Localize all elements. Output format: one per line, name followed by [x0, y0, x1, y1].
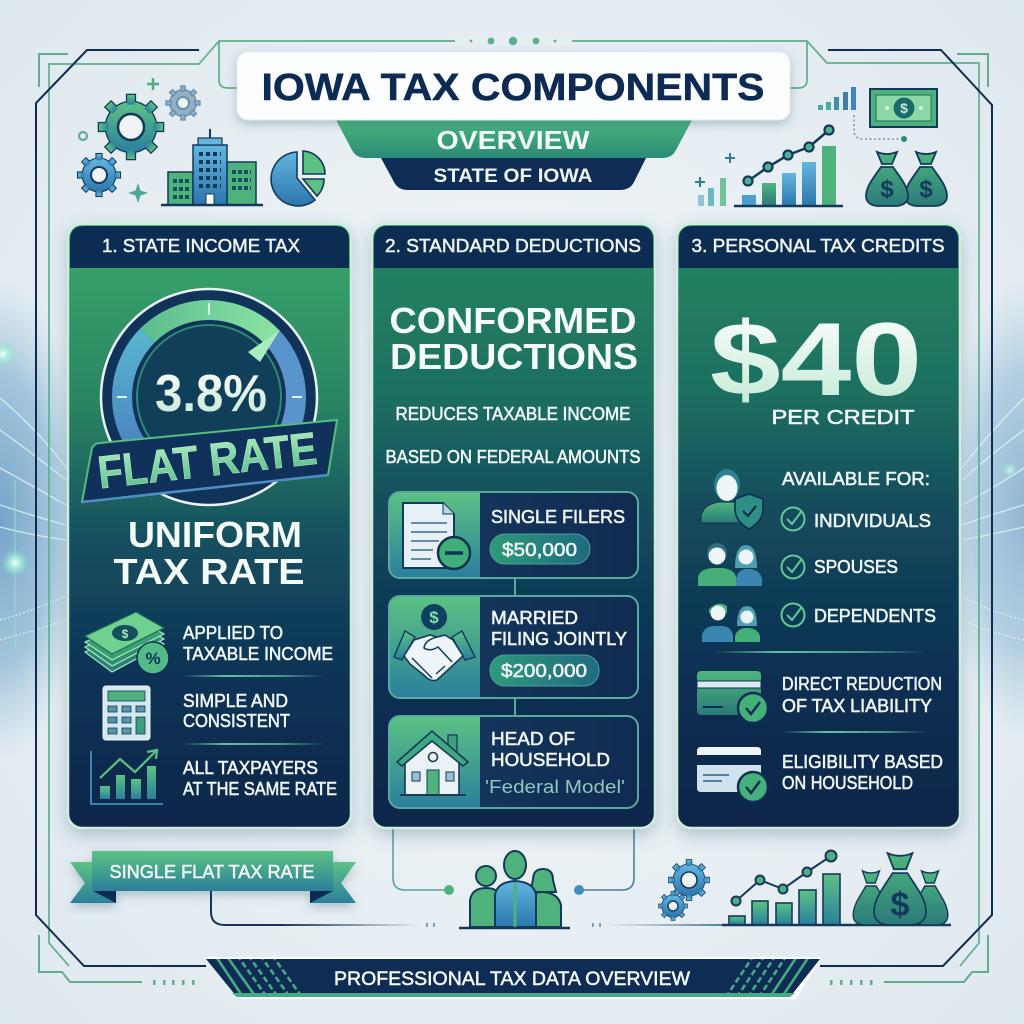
chart bottom [722, 850, 951, 925]
icon: handshake [394, 604, 475, 680]
availability heading: AVAILABLE FOR: [782, 469, 930, 489]
state of iowa ribbon: STATE OF IOWA [434, 165, 592, 187]
row: married filing jointly: FILING JOINTLY [491, 629, 627, 649]
item text: applied [183, 623, 333, 664]
credit amount: PER CREDIT [772, 407, 914, 429]
pill: $200,000: $200,000 [501, 661, 587, 681]
conformed deductions heading [390, 300, 638, 377]
panel heading: 3. PERSONAL TAX CREDITS [692, 236, 944, 256]
icons: top left gears, building, pie [78, 78, 325, 206]
money bags bottom: $ [891, 886, 910, 924]
icon: person with shield [701, 469, 763, 529]
icon: money bags: $ [880, 176, 894, 203]
item text: direct reduction: DIRECT REDUCTION [782, 674, 942, 694]
subtitle: TAX RATE [114, 551, 304, 592]
connector dots [444, 885, 584, 895]
panel heading [374, 226, 653, 268]
icon: pie chart [271, 151, 325, 206]
icon: dollar bill: $ [900, 100, 908, 116]
panel: personal tax credits [677, 224, 960, 828]
check list: DEPENDENTS [814, 606, 936, 626]
row: head of household: HOUSEHOLD [491, 750, 610, 770]
icon: growth chart [695, 126, 907, 206]
footer banner [204, 955, 822, 1000]
icon: document minus [403, 503, 470, 569]
item text: direct reduction [782, 674, 942, 716]
pill: $50,000: $50,000 [502, 540, 577, 560]
row: married filing jointly: MARRIED [491, 608, 578, 628]
item text: eligibility: ELIGIBILITY BASED [782, 752, 943, 772]
footer banner: PROFESSIONAL TAX DATA OVERVIEW [334, 968, 691, 990]
icon: handshake: $ [429, 608, 439, 627]
icon: dotted connector [854, 115, 901, 139]
icon: cash stack: $ [122, 627, 129, 641]
check list: SPOUSES [814, 557, 898, 577]
icon: dollar bill [870, 89, 937, 127]
pill: $200,000 [490, 655, 599, 686]
title banner [237, 52, 790, 190]
icon: calculator [103, 686, 150, 740]
panel connectors [393, 828, 634, 890]
panel heading [70, 226, 349, 268]
subtitle [114, 514, 304, 592]
panel heading: 2. STANDARD DEDUCTIONS [385, 236, 641, 256]
icon: house [397, 731, 468, 795]
item text: simple [183, 691, 290, 731]
icon: cash stack: % [145, 649, 161, 668]
overview ribbon [336, 120, 692, 158]
state of iowa ribbon [381, 158, 646, 190]
icon: credit card check [697, 671, 768, 723]
credit amount: $40 [710, 302, 922, 418]
panel: state income tax [68, 224, 351, 828]
icon: buildings [161, 129, 263, 205]
panel heading [679, 226, 958, 268]
item text: eligibility: ON HOUSEHOLD [782, 773, 913, 793]
hatching [216, 959, 809, 993]
row: married filing jointly [389, 596, 638, 698]
item text: applied: APPLIED TO [183, 623, 283, 643]
pill: $50,000 [490, 534, 590, 564]
row: head of household: 'Federal Model' [485, 777, 625, 797]
item text: simple: SIMPLE AND [183, 691, 288, 711]
item text: simple: CONSISTENT [183, 711, 290, 731]
icon: money bags: $ [919, 176, 933, 203]
icon: cash stack [85, 612, 169, 674]
row: head of household [389, 716, 638, 808]
ribbon: single flat tax rate [70, 851, 356, 903]
description [386, 404, 640, 467]
icon: id card check [697, 747, 768, 802]
icon: small bars [818, 87, 856, 110]
flat rate banner: FLAT RATE [95, 422, 319, 498]
icon: gears [78, 78, 200, 203]
ribbon: single flat tax rate: SINGLE FLAT TAX RATE [110, 862, 314, 882]
icon: rising chart [91, 750, 163, 804]
row: single filers: SINGLE FILERS [491, 507, 625, 527]
check list: INDIVIDUALS [814, 511, 931, 531]
icon: dependents [702, 604, 760, 642]
conformed deductions heading: CONFORMED [390, 300, 636, 341]
connector: ribbon to people [211, 891, 726, 927]
description: BASED ON FEDERAL AMOUNTS [386, 447, 640, 467]
gauge: 3.8% [155, 365, 267, 423]
panel: standard deductions [372, 224, 655, 828]
conformed deductions heading: DEDUCTIONS [390, 336, 638, 377]
item text: direct reduction: OF TAX LIABILITY [782, 696, 932, 716]
item text: all taxpayers: AT THE SAME RATE [183, 779, 337, 799]
item text: applied: TAXABLE INCOME [183, 644, 333, 664]
item text: all taxpayers: ALL TAXPAYERS [183, 758, 318, 778]
overview ribbon: OVERVIEW [436, 125, 590, 155]
title card [237, 52, 790, 120]
subtitle: UNIFORM [128, 514, 302, 555]
item text: eligibility [782, 752, 943, 793]
row: head of household: HEAD OF [491, 729, 575, 749]
icons: top right finance [695, 87, 947, 206]
title card: IOWA TAX COMPONENTS [262, 67, 764, 109]
icon: money bags [866, 152, 947, 206]
check list [782, 508, 936, 626]
gauge [101, 289, 317, 505]
money bags bottom [853, 853, 948, 925]
item text: all taxpayers [183, 758, 337, 799]
icons: gears bottom [659, 860, 709, 920]
icon: people group [459, 851, 570, 928]
icon: spouses [698, 543, 762, 586]
panel heading: 1. STATE INCOME TAX [102, 236, 300, 256]
row: single filers [389, 492, 638, 578]
description: REDUCES TAXABLE INCOME [396, 404, 630, 424]
